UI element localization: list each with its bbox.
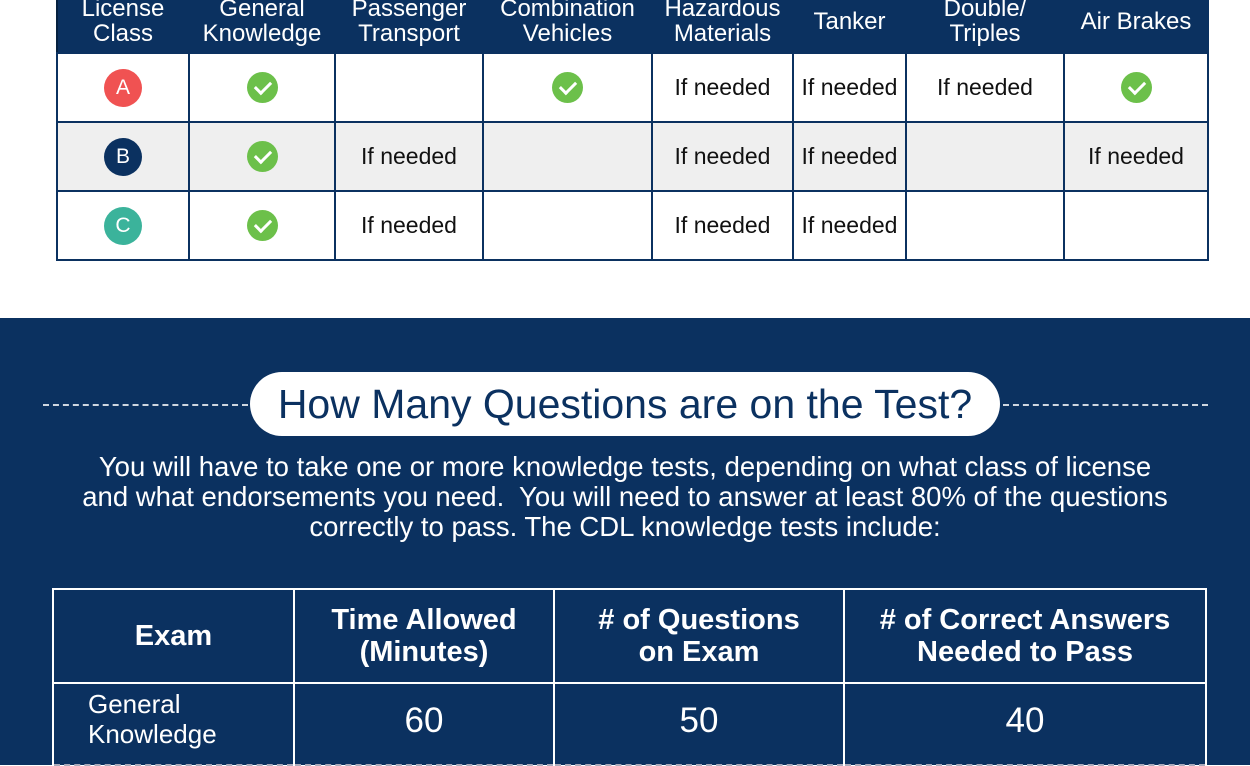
table: knowledge tests: # of Questions — [598, 604, 800, 636]
table: knowledge tests: 60 — [405, 701, 443, 740]
table: knowledge tests: 40 — [1006, 701, 1044, 740]
table: license class endorsements: If needed — [802, 74, 897, 100]
table: knowledge tests: 50 — [680, 701, 718, 740]
table: license class endorsements: B — [116, 144, 130, 168]
table: license class endorsements: Knowledge — [203, 20, 321, 47]
table: license class endorsements — [56, 0, 1209, 261]
table: license class endorsements: If needed — [675, 143, 770, 169]
table: license class endorsements: If needed — [937, 74, 1033, 100]
intro paragraph: and what endorsements you need. You will need to answer at least 80% of the questions — [82, 481, 1168, 512]
heading pill: How Many Questions are on the Test? — [278, 381, 972, 427]
table: knowledge tests: (Minutes) — [360, 636, 488, 668]
table: license class endorsements: If needed — [361, 143, 457, 169]
table: knowledge tests: Knowledge — [88, 719, 217, 749]
table: knowledge tests: General — [88, 689, 180, 719]
table: license class endorsements: If needed — [361, 212, 457, 238]
table: license class endorsements: C — [115, 214, 131, 236]
table: license class endorsements: Transport — [358, 20, 460, 47]
table: license class endorsements: If needed — [675, 212, 770, 238]
table: knowledge tests: Exam — [135, 620, 212, 652]
table: knowledge tests: Needed to Pass — [917, 636, 1133, 668]
table: license class endorsements: Tanker — [813, 8, 886, 34]
panel: questions section — [0, 318, 1250, 765]
table: license class endorsements: Class — [93, 20, 153, 47]
table: license class endorsements: Materials — [674, 20, 771, 47]
table: knowledge tests: Time Allowed — [331, 604, 517, 636]
table: knowledge tests: # of Correct Answers — [880, 604, 1170, 636]
table: license class endorsements: Vehicles — [523, 20, 612, 47]
table: license class endorsements: If needed — [802, 143, 897, 169]
table: license class endorsements: Triples — [949, 20, 1021, 47]
table: license class endorsements: If needed — [802, 212, 897, 238]
table: license class endorsements: A — [116, 76, 130, 98]
table: license class endorsements: If needed — [1088, 143, 1184, 169]
intro paragraph: correctly to pass. The CDL knowledge tests include: — [309, 511, 941, 542]
table: knowledge tests: on Exam — [639, 636, 759, 668]
table: license class endorsements: If needed — [675, 74, 770, 100]
table: license class endorsements: Air Brakes — [1081, 8, 1191, 34]
intro paragraph — [82, 451, 1168, 542]
table: knowledge tests — [52, 588, 1207, 766]
heading pill — [250, 372, 1000, 436]
intro paragraph: You will have to take one or more knowledge tests, depending on what class of license — [99, 451, 1151, 482]
